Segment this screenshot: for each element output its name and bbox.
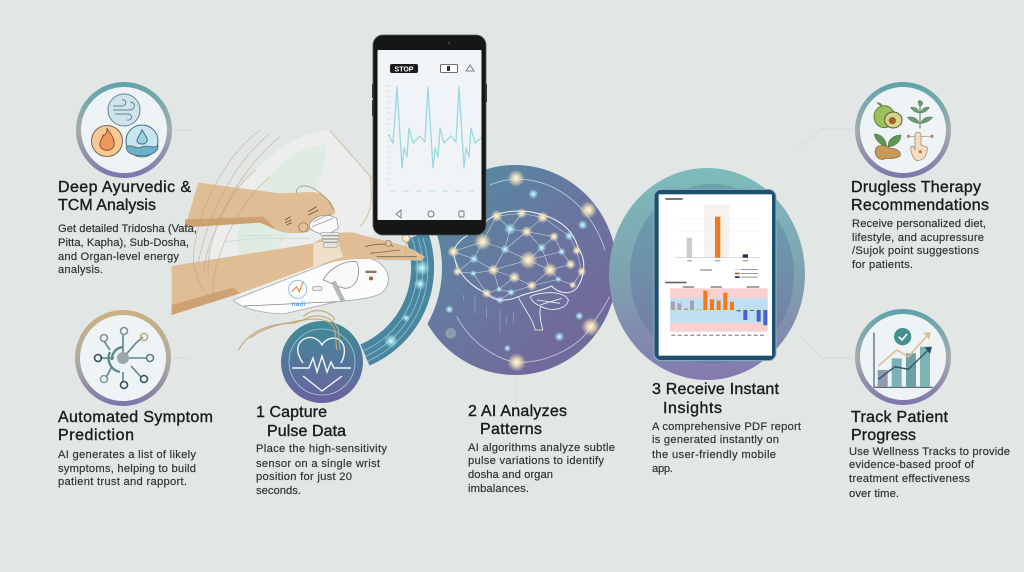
- text: track patient progress: [849, 409, 1010, 500]
- stop button: STOP: [395, 66, 414, 74]
- text: drugless therapy recommendations: Receive personalized diet,: [852, 218, 986, 230]
- translucent glow behind hands: [210, 130, 373, 297]
- icon: upper arm and hand: [185, 183, 336, 233]
- text: step 1 capture pulse data: 1 Capture: [256, 404, 327, 421]
- text: automated symptom prediction: symptoms, helping to build: [58, 463, 196, 475]
- phone with pulse waveform: [372, 35, 487, 235]
- text: automated symptom prediction: patient trust and rapport.: [58, 476, 187, 488]
- stop button: [390, 64, 418, 74]
- icon: symptom prediction network: [78, 312, 168, 404]
- text: drugless therapy recommendations: Recommendations: [851, 197, 989, 214]
- icon: three doshas: [78, 84, 170, 176]
- icon: track progress chart: [858, 312, 948, 402]
- text: step 1 capture pulse data: [256, 404, 387, 497]
- text: automated symptom prediction: AI generates a list of likely: [58, 449, 196, 461]
- icon: pulse sensor device: [233, 257, 388, 314]
- text: deep ayurvedic analysis: Pitta, Kapha), Sub-Dosha,: [58, 237, 189, 249]
- text: deep ayurvedic analysis: [58, 179, 197, 276]
- text: step 2 ai analyzes patterns: imbalances.: [468, 483, 529, 495]
- panel: tablet disc: [609, 168, 805, 380]
- text: deep ayurvedic analysis: analysis.: [58, 264, 103, 276]
- text: track patient progress: evidence-based proof of: [849, 459, 975, 471]
- text: track patient progress: Use Wellness Tracks to provide: [849, 446, 1010, 458]
- text: automated symptom prediction: Prediction: [58, 427, 134, 444]
- faint connector lines: [172, 129, 853, 410]
- text: track patient progress: Track Patient: [851, 409, 949, 426]
- text: deep ayurvedic analysis: and Organ-level energy: [58, 251, 179, 263]
- panel: AI brain disc: [214, 154, 617, 382]
- text: track patient progress: over time.: [849, 488, 899, 500]
- text: automated symptom prediction: [58, 409, 213, 488]
- phone navigation bar: [396, 210, 464, 218]
- text: drugless therapy recommendations: [851, 179, 989, 271]
- waveform chart: [388, 85, 481, 191]
- text: step 2 ai analyzes patterns: AI algorithms analyze subtle: [468, 442, 615, 454]
- text: step 1 capture pulse data: position for just 20: [256, 471, 352, 483]
- text: step 1 capture pulse data: Pulse Data: [267, 423, 346, 440]
- text: step 3 receive instant insights: [652, 381, 802, 475]
- panel: pulse data disc: [281, 321, 363, 403]
- text: step 1 capture pulse data: Place the high-sensitivity: [256, 443, 387, 455]
- text: step 3 receive instant insights: Insights: [663, 400, 722, 417]
- icon: sensor probe: [309, 214, 339, 247]
- text: step 3 receive instant insights: is generated instantly on: [652, 434, 779, 446]
- text: step 1 capture pulse data: seconds.: [256, 485, 301, 497]
- icon: heart with pulse: [292, 337, 351, 391]
- wires crossing over the arms: [193, 130, 280, 302]
- tablet with report: [654, 189, 776, 361]
- text: deep ayurvedic analysis: Get detailed Tridosha (Vata,: [58, 223, 197, 235]
- arc band around pulse disc: [363, 236, 430, 361]
- text: step 2 ai analyzes patterns: 2 AI Analyzes: [468, 403, 567, 420]
- text: drugless therapy recommendations: lifestyle, and acupressure: [852, 232, 984, 244]
- text: step 2 ai analyzes patterns: dosha and organ: [468, 469, 553, 481]
- text: deep ayurvedic analysis: TCM Analysis: [58, 197, 156, 214]
- icon: drugless therapy: [858, 84, 948, 176]
- text: track patient progress: treatment effectiveness: [849, 473, 970, 485]
- text: drugless therapy recommendations: Drugless Therapy: [851, 179, 981, 196]
- text: step 2 ai analyzes patterns: pulse variations to identify: [468, 455, 604, 467]
- text: step 3 receive instant insights: app.: [652, 463, 673, 475]
- text: automated symptom prediction: Automated Symptom: [58, 409, 213, 426]
- text: drugless therapy recommendations: for patients.: [852, 259, 913, 271]
- text: drugless therapy recommendations: /Sujok point suggestions: [852, 245, 979, 257]
- icon: pulse sensor device: nadi: [292, 301, 305, 308]
- text: step 2 ai analyzes patterns: [468, 403, 615, 495]
- brain network: [445, 170, 609, 372]
- text: deep ayurvedic analysis: Deep Ayurvedic &: [58, 179, 191, 196]
- wires from device to pulse disc: [238, 311, 340, 350]
- text: step 3 receive instant insights: the user-friendly mobile: [652, 449, 776, 461]
- device and hands: [172, 130, 425, 315]
- text: step 3 receive instant insights: 3 Receive Instant: [652, 381, 780, 398]
- text: track patient progress: Progress: [851, 427, 916, 444]
- text: step 1 capture pulse data: sensor on a single wrist: [256, 458, 381, 470]
- pause and share controls: [440, 64, 474, 72]
- icon: lower arm and hand: [172, 232, 425, 315]
- text: step 3 receive instant insights: A comprehensive PDF report: [652, 421, 802, 433]
- text: step 2 ai analyzes patterns: Patterns: [480, 421, 542, 438]
